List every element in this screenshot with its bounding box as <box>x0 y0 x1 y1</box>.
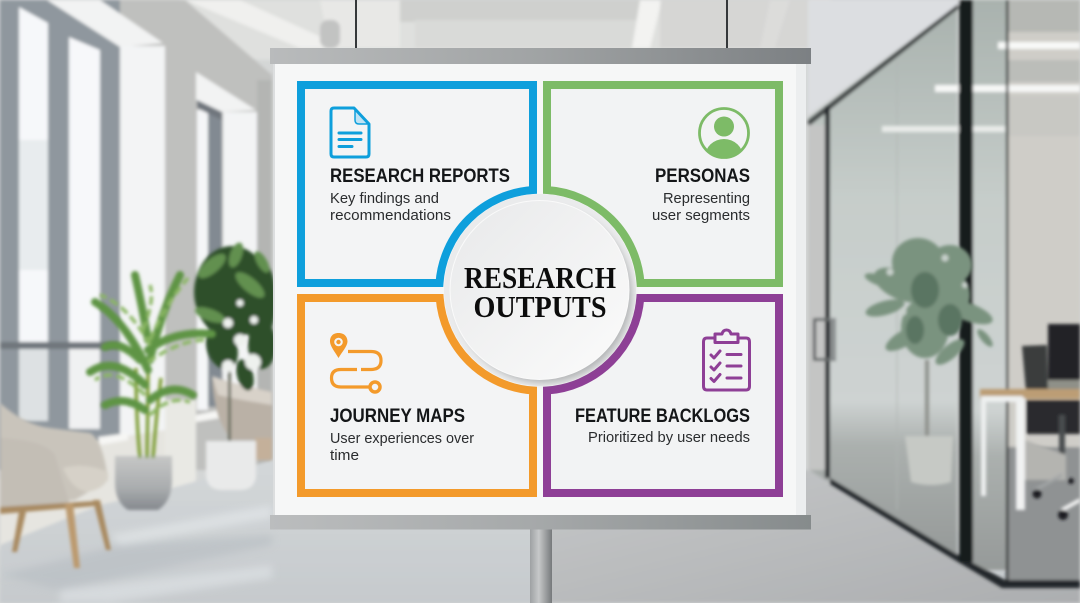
description: journey maps: time <box>330 447 359 464</box>
armchair <box>0 403 111 568</box>
top rail <box>270 48 811 64</box>
heading: feature backlogs: FEATURE BACKLOGS <box>575 406 750 427</box>
icon: clipboard checklist <box>704 330 750 390</box>
desk and chair behind glass <box>980 324 1080 520</box>
heading: journey maps: JOURNEY MAPS <box>330 406 465 427</box>
description: research reports <box>330 190 451 224</box>
icon: route map <box>330 333 381 392</box>
icon: document <box>331 108 369 157</box>
plant behind glass <box>863 238 996 485</box>
description: personas: Representing <box>663 190 750 207</box>
plant in white pot <box>193 241 276 490</box>
poster board <box>270 48 811 530</box>
floor <box>0 460 1080 603</box>
title: OUTPUTS <box>474 289 606 324</box>
right glass partition <box>808 0 1080 588</box>
stand pole <box>530 528 552 603</box>
panel: research reports <box>301 85 533 283</box>
center hub <box>444 194 636 386</box>
panel: journey maps <box>301 298 533 493</box>
description: personas: user segments <box>652 207 750 224</box>
ceiling <box>180 0 830 60</box>
description: personas <box>652 190 750 224</box>
description: research reports: Key findings and <box>330 190 439 207</box>
heading: research reports: RESEARCH REPORTS <box>330 166 510 187</box>
panel: personas <box>547 85 779 283</box>
floor streaks <box>0 505 272 603</box>
left windows and wall <box>0 0 272 550</box>
description: journey maps: User experiences over <box>330 430 474 447</box>
hanging wires <box>355 0 728 48</box>
description: research reports: recommendations <box>330 207 451 224</box>
title <box>464 260 616 324</box>
icon: person <box>698 107 750 159</box>
description: feature backlogs: Prioritized by user needs <box>588 429 750 446</box>
description: journey maps <box>330 430 474 464</box>
panel: feature backlogs <box>547 298 779 493</box>
heading: personas: PERSONAS <box>655 166 750 187</box>
palm plant in grey pot <box>90 275 212 510</box>
title: RESEARCH <box>464 260 616 295</box>
bottom rail <box>270 515 811 530</box>
